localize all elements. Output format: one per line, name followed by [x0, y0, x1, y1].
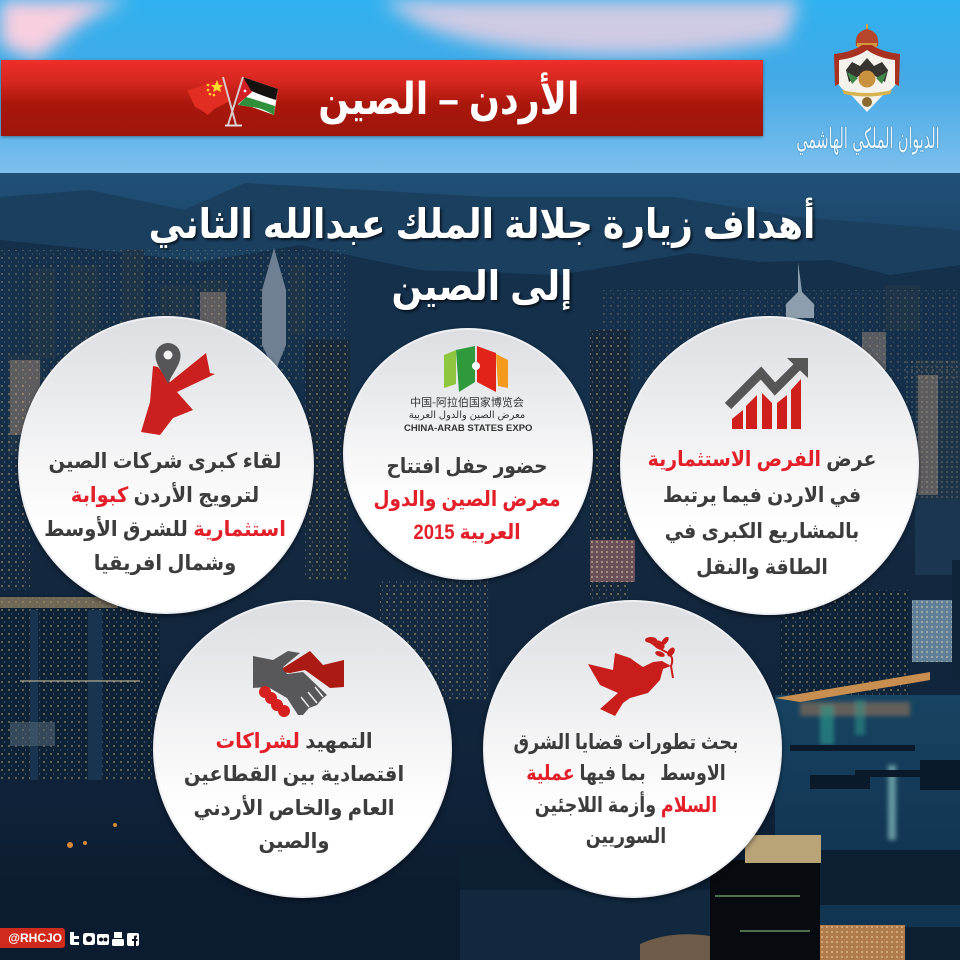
expo logo text [404, 394, 532, 434]
text: investment opportunities: في الاردن فيما يرتبط [663, 484, 861, 507]
icon: royal coat of arms [834, 24, 900, 112]
lower left towers [0, 595, 160, 780]
right side towers and water [780, 590, 910, 700]
panel: economic partnerships [153, 600, 452, 898]
handle tag [0, 928, 65, 948]
panel: expo [343, 328, 593, 580]
expo logo text: 中国-阿拉伯国家博览会 [410, 394, 524, 410]
expo logo text: معرض الصين والدول العربية [409, 410, 525, 421]
text: investment opportunities: بالمشاريع الكبرى في [665, 520, 859, 543]
panel: meeting Chinese companies [18, 316, 314, 614]
icon: China-Arab States Expo logo [404, 346, 532, 434]
icon: rising bar chart [724, 358, 808, 429]
text: Middle East issues [514, 731, 738, 848]
text: Middle East issues: الاوسط بما فيها عملية [526, 762, 726, 785]
text: expo [373, 455, 561, 544]
royal court logotype: الديوان الملكي الهاشمي [796, 122, 940, 155]
text: meeting Chinese companies: استثمارية للشرق الأوسط [44, 518, 286, 541]
text: Middle East issues: السوريين [586, 825, 666, 848]
text: meeting Chinese companies: لقاء كبرى شركات الصين [49, 450, 281, 473]
title banner [1, 60, 763, 136]
text: economic partnerships [184, 730, 404, 853]
icon: Jordan map with pin [141, 343, 215, 435]
main heading [149, 198, 816, 313]
text: meeting Chinese companies: وشمال افريقيا [94, 552, 236, 575]
panel: investment opportunities [620, 316, 919, 615]
icon: peace dove [588, 636, 675, 716]
text: Middle East issues: بحث تطورات قضايا الشرق [514, 731, 738, 754]
social media icons [70, 932, 139, 946]
text: expo: حضور حفل افتتاح [387, 455, 547, 478]
handle tag: @RHCJO [8, 931, 62, 945]
text: economic partnerships: التمهيد لشراكات [215, 730, 373, 753]
expo logo text: CHINA-ARAB STATES EXPO [404, 423, 532, 434]
upper towers [8, 250, 960, 510]
text: investment opportunities: عرض الفرص الاستثمارية [648, 448, 876, 471]
main heading: إلى الصين [391, 263, 573, 309]
text: meeting Chinese companies [44, 450, 286, 575]
text: expo: معرض الصين والدول [373, 488, 561, 511]
text: investment opportunities: الطاقة والنقل [696, 556, 828, 579]
main heading: أهداف زيارة جلالة الملك عبدالله الثاني [149, 201, 815, 247]
mid buildings behind the circles [305, 340, 350, 580]
text: economic partnerships: اقتصادية بين القطاعين [184, 763, 404, 786]
panel: Middle East issues [483, 600, 782, 898]
text: economic partnerships: العام والخاص الأردني [194, 797, 394, 820]
hills [0, 183, 960, 420]
banner heading: الأردن – الصين [318, 75, 580, 124]
text: Middle East issues: السلام وأزمة اللاجئين [535, 794, 717, 817]
text: investment opportunities [648, 448, 876, 579]
lower band and buildings [460, 850, 960, 960]
icon: handshake [253, 651, 344, 717]
text: expo: العربية 2015 [413, 521, 521, 544]
text: economic partnerships: والصين [259, 830, 329, 853]
icon: crossed flags [187, 76, 278, 126]
text: meeting Chinese companies: لترويج الأردن كبوابة [71, 484, 259, 507]
